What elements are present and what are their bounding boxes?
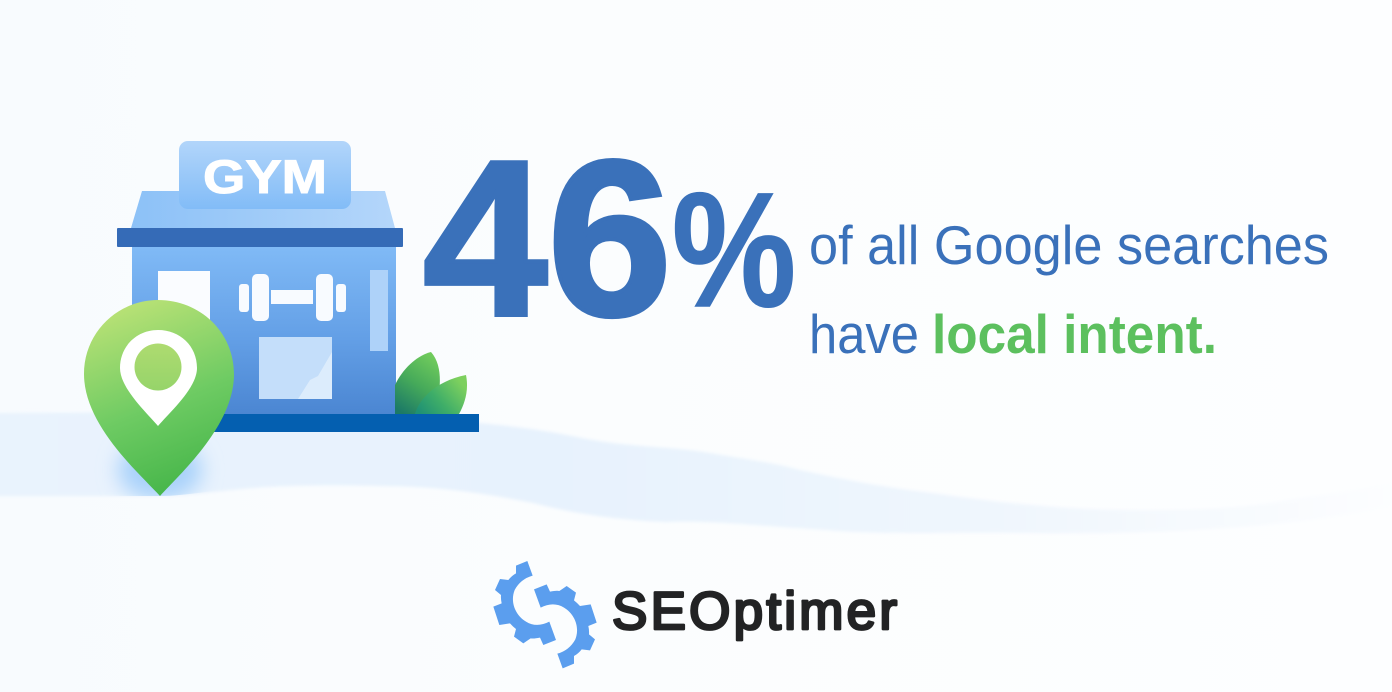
supporting text: [809, 214, 1329, 365]
headline statistic: 46: [423, 115, 672, 363]
headline statistic: [423, 115, 796, 363]
icon: location pin: [84, 300, 234, 496]
front window: [259, 337, 332, 399]
supporting text: have: [809, 303, 919, 365]
SEOptimer logo: [493, 561, 897, 668]
building body: [132, 247, 396, 414]
gym illustration: [84, 141, 479, 500]
supporting text: local intent.: [932, 303, 1217, 365]
icon: gear logo: [493, 561, 597, 668]
side window: [370, 270, 388, 351]
gym sign: GYM: [203, 150, 327, 203]
ground base: [205, 414, 479, 432]
background wave: [0, 412, 1392, 533]
pin shadow: [118, 440, 202, 500]
gym sign: [179, 141, 351, 209]
logo wordmark: SEOptimer: [612, 582, 897, 641]
supporting text: of all Google searches: [809, 214, 1329, 276]
gym sign roof: [131, 191, 395, 228]
icon: leaves: [395, 352, 467, 414]
awning band: [117, 228, 403, 247]
icon: dumbbell: [239, 274, 346, 321]
headline statistic: %: [672, 158, 796, 341]
door: [158, 271, 210, 331]
infographic canvas: [0, 141, 1328, 668]
